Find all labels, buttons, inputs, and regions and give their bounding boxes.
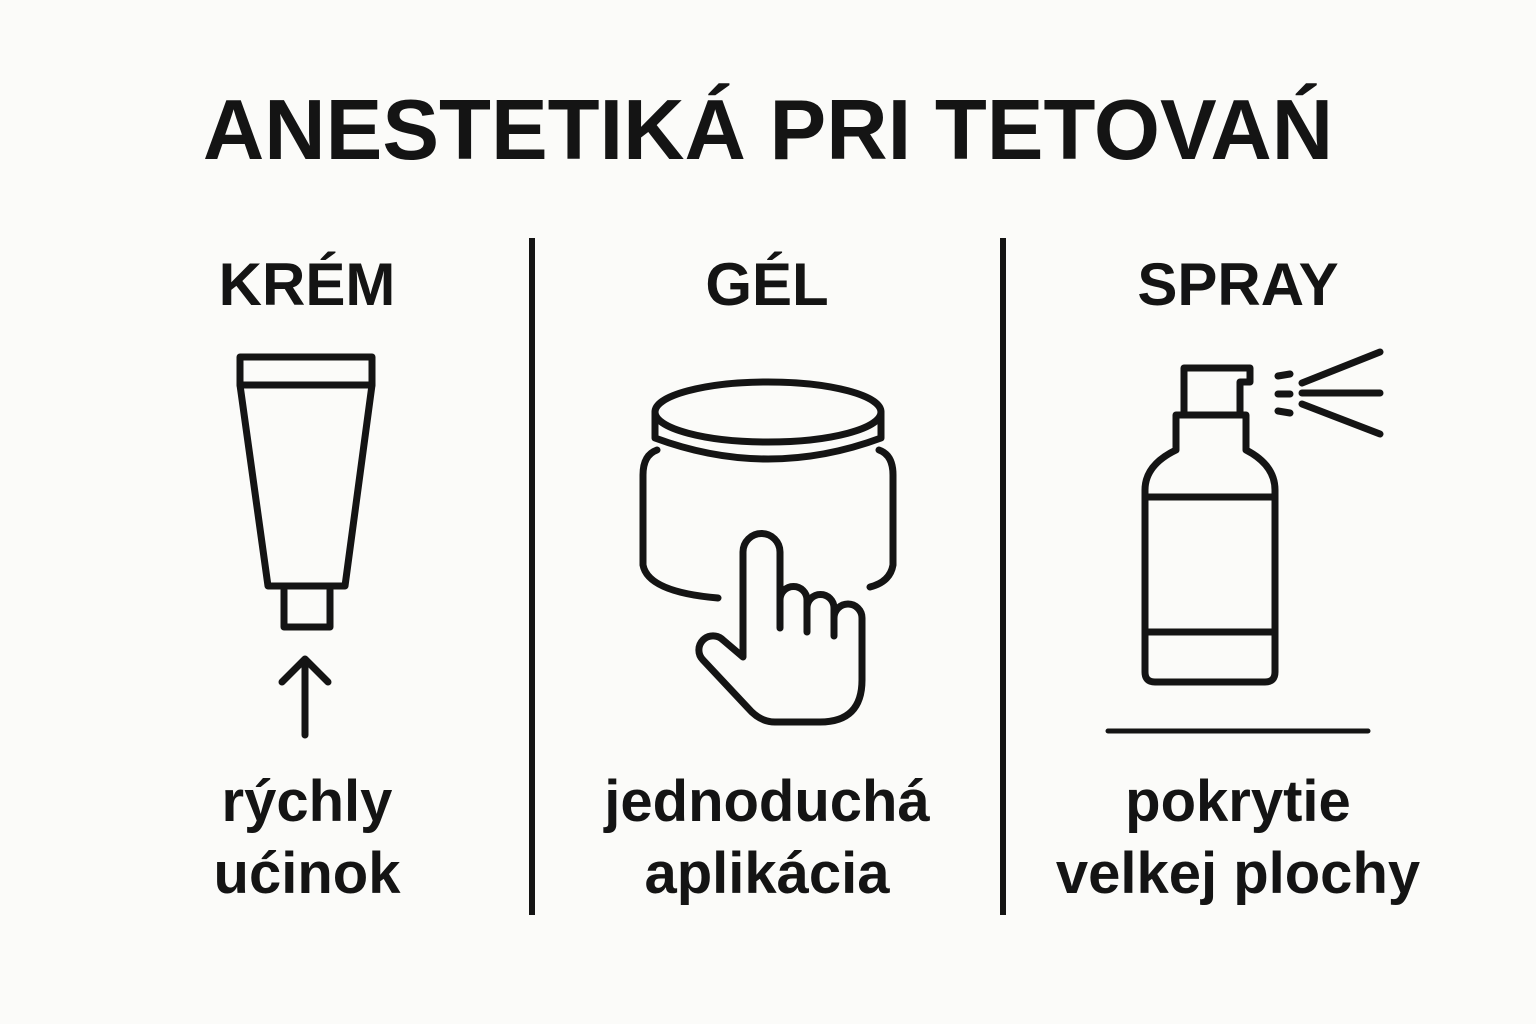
- text: gél benefit: jednoduchá: [604, 769, 930, 834]
- text: spray benefit: velkej plochy: [1056, 841, 1420, 906]
- icon: jar with hand: [643, 382, 893, 722]
- text: krém benefit: [214, 769, 400, 906]
- heading: krém: KRÉM: [219, 251, 395, 318]
- divider right: [1000, 238, 1006, 915]
- text: spray benefit: pokrytie: [1125, 769, 1351, 834]
- arrow up: [282, 659, 328, 735]
- title: ANESTETIKÁ PRI TETOVAŃ: [203, 83, 1333, 178]
- icon: tube: [240, 357, 372, 627]
- heading: gél: GÉL: [705, 251, 829, 318]
- text: krém benefit: rýchly: [222, 769, 392, 834]
- divider left: [529, 238, 535, 915]
- icon: spray bottle: [1145, 352, 1380, 682]
- heading: spray: SPRAY: [1137, 251, 1339, 318]
- separator line spray: [1108, 728, 1368, 734]
- text: spray benefit: [1056, 769, 1420, 906]
- text: gél benefit: aplikácia: [644, 841, 890, 906]
- text: krém benefit: ućinok: [214, 841, 400, 906]
- text: gél benefit: [603, 769, 930, 906]
